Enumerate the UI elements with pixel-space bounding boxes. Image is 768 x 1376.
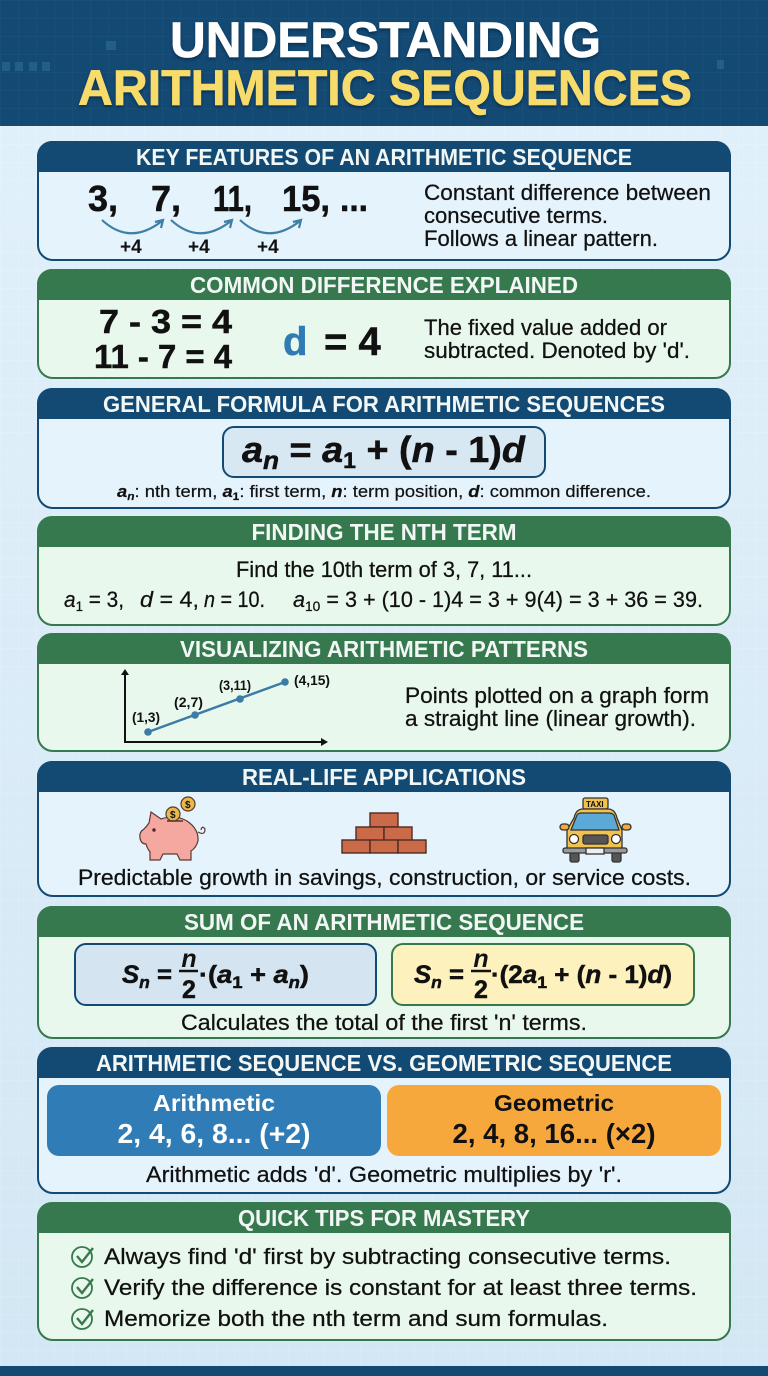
formula: blue: n <box>181 945 197 973</box>
description <box>405 683 709 731</box>
description <box>424 180 711 251</box>
description: Points plotted on a graph form <box>405 683 709 708</box>
formula legend: n: term position, d: common difference. <box>331 482 638 501</box>
description: Follows a linear pattern. <box>424 226 658 251</box>
panel: arithmetic vs geometric <box>37 1047 731 1193</box>
d equals 4: = 4 <box>324 320 381 364</box>
panel: common difference <box>37 269 731 378</box>
formula: yellow: ·(2a <box>491 961 537 989</box>
formula box <box>223 427 545 477</box>
worked solution: n = 10. <box>204 587 265 612</box>
number sequence <box>88 178 368 219</box>
line graph: (4,15) <box>294 672 330 688</box>
formula: yellow: n <box>431 973 442 992</box>
formula: yellow: S <box>414 961 431 989</box>
line graph <box>121 669 330 746</box>
heading: GENERAL FORMULA FOR ARITHMETIC SEQUENCES <box>103 391 665 417</box>
difference labels: +4 <box>120 237 142 258</box>
panel: finding the nth term <box>37 516 731 625</box>
arithmetic card <box>47 1085 381 1156</box>
formula: yellow: n - 1)d) <box>585 961 672 989</box>
panel: sum of sequence <box>37 906 731 1038</box>
formula: yellow: 2 <box>474 976 488 1004</box>
title <box>78 12 692 116</box>
worked solution: = 3, <box>83 587 124 612</box>
tip 2: Verify the difference is constant for at least three terms. <box>104 1275 697 1300</box>
difference labels: +4 <box>257 237 279 258</box>
worked solution: 10 <box>305 598 321 614</box>
difference labels <box>120 237 279 258</box>
formula box: a <box>242 429 263 470</box>
worked solution: a <box>64 587 76 612</box>
description: The fixed value added or <box>424 315 667 340</box>
worked solution: d = 4, <box>140 587 199 612</box>
icon: piggy bank: $ <box>185 800 191 811</box>
formula: yellow: 1 <box>537 973 547 992</box>
worked solution: a <box>293 587 305 612</box>
arithmetic card: Arithmetic <box>153 1090 275 1116</box>
arithmetic card: 2, 4, 6, 8... (+2) <box>118 1118 310 1149</box>
panel: real-life applications <box>37 761 731 896</box>
panel: quick tips <box>37 1202 731 1340</box>
formula: yellow: + ( <box>547 961 586 989</box>
formula box: + ( <box>356 429 412 470</box>
formula legend: : first term, <box>239 482 331 501</box>
formula legend: n <box>127 491 135 503</box>
description: Arithmetic adds 'd'. Geometric multiplies by 'r'. <box>146 1162 622 1187</box>
description: a straight line (linear growth). <box>405 706 696 731</box>
line graph: (2,7) <box>174 694 203 710</box>
heading: KEY FEATURES OF AN ARITHMETIC SEQUENCE <box>136 144 632 170</box>
heading: REAL-LIFE APPLICATIONS <box>242 764 526 790</box>
difference labels: +4 <box>188 237 210 258</box>
panel: key features <box>37 141 731 260</box>
geometric card: Geometric <box>494 1090 614 1116</box>
formula: blue: 1 <box>232 973 243 992</box>
description: Predictable growth in savings, construction, or service costs. <box>78 865 691 890</box>
formula box: n <box>263 447 279 475</box>
formula: blue: S <box>122 961 139 989</box>
formula: blue: ·(a <box>199 961 231 989</box>
heading: FINDING THE NTH TERM <box>252 519 516 545</box>
formula box: = <box>279 429 322 470</box>
formula legend: a <box>117 482 127 501</box>
question: Find the 10th term of 3, 7, 11... <box>236 557 532 582</box>
formula: blue: = <box>150 961 172 989</box>
icon: taxi: TAXI <box>586 800 604 809</box>
number sequence: 3, <box>88 178 118 219</box>
worked solution: 1 <box>76 598 83 614</box>
number sequence: 11, <box>213 178 252 219</box>
heading: COMMON DIFFERENCE EXPLAINED <box>190 272 578 298</box>
formula: yellow <box>392 944 694 1005</box>
geometric card <box>387 1085 721 1156</box>
d equals 4: d <box>283 320 307 364</box>
formula legend: a <box>222 482 233 501</box>
footer bar <box>0 1366 768 1376</box>
panel: general formula <box>37 388 731 508</box>
formula legend: : nth term, <box>135 482 222 501</box>
formula legend: 1 <box>233 491 239 503</box>
formula: blue <box>75 944 376 1005</box>
heading: ARITHMETIC SEQUENCE VS. GEOMETRIC SEQUENCE <box>96 1050 672 1076</box>
tip 3: Memorize both the nth term and sum formulas. <box>104 1306 608 1331</box>
title: ARITHMETIC SEQUENCES <box>78 60 692 116</box>
formula: yellow: = <box>442 961 464 989</box>
worked solution: = 3 + (10 - 1)4 = 3 + 9(4) = 3 + 36 = 39. <box>320 587 703 612</box>
formula: blue: + <box>243 961 274 989</box>
d equals 4 <box>283 320 381 364</box>
formula: blue: 2 <box>182 976 196 1004</box>
difference arrows <box>102 220 301 233</box>
heading: QUICK TIPS FOR MASTERY <box>238 1205 530 1231</box>
formula: blue: a <box>274 961 289 989</box>
icon: taxi <box>560 798 631 862</box>
tip 1: Always find 'd' first by subtracting consecutive terms. <box>104 1244 671 1269</box>
formula: yellow: n <box>473 945 489 973</box>
description <box>424 315 690 363</box>
title: UNDERSTANDING <box>170 12 601 68</box>
icon: bricks <box>342 813 426 853</box>
description: subtracted. Denoted by 'd'. <box>424 338 690 363</box>
description: consecutive terms. <box>424 203 608 228</box>
formula box: n - 1)d <box>412 429 524 470</box>
icon: piggy bank <box>140 797 205 860</box>
line graph: (1,3) <box>132 709 160 725</box>
description: Constant difference between <box>424 180 711 205</box>
panel: visualizing patterns <box>37 633 731 751</box>
description: Calculates the total of the first 'n' terms. <box>181 1010 587 1035</box>
formula: blue: n <box>139 973 150 992</box>
formula: blue: ) <box>300 961 309 989</box>
number sequence: 15, <box>282 178 330 219</box>
formula box: a <box>322 429 343 470</box>
formula box: 1 <box>343 448 356 473</box>
subtraction examples: 11 - 7 = 4 <box>94 338 233 375</box>
formula: blue: n <box>289 973 300 992</box>
heading: VISUALIZING ARITHMETIC PATTERNS <box>180 636 588 662</box>
icon: piggy bank: $ <box>170 810 176 821</box>
heading: SUM OF AN ARITHMETIC SEQUENCE <box>184 909 584 935</box>
worked solution <box>64 587 703 614</box>
number sequence: 7, <box>151 178 181 219</box>
number sequence: ... <box>340 178 368 219</box>
line graph: (3,11) <box>219 677 251 693</box>
subtraction examples <box>94 303 233 375</box>
subtraction examples: 7 - 3 = 4 <box>99 303 233 340</box>
header banner <box>0 0 768 126</box>
geometric card: 2, 4, 8, 16... (×2) <box>452 1118 656 1149</box>
